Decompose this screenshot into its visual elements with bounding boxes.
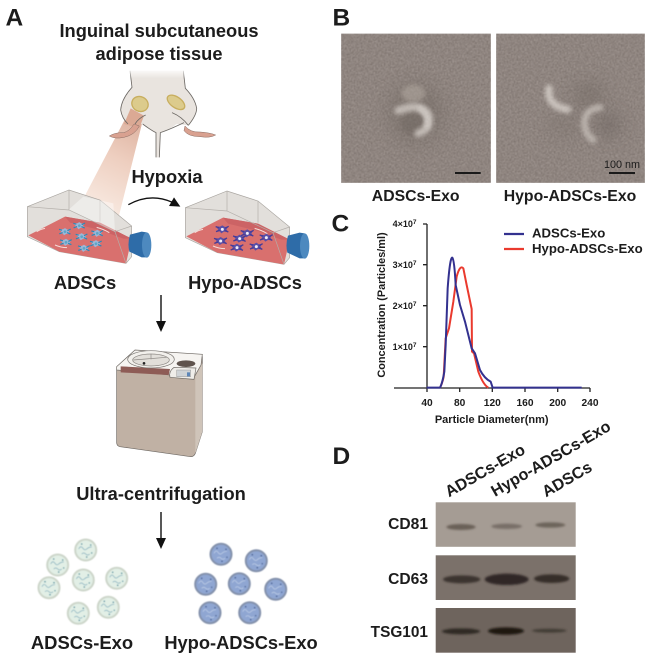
y-axis tick labels: 1×10 bbox=[393, 342, 413, 352]
blot: CD63 bbox=[436, 555, 576, 600]
icon: ultracentrifuge bbox=[117, 350, 202, 457]
icon: ADSCs exosome cluster bbox=[38, 540, 127, 624]
label: ADSCs: ADSCs bbox=[54, 272, 116, 293]
x-axis tick labels: 40 bbox=[421, 398, 433, 409]
panel C: particle size distribution bbox=[332, 210, 643, 426]
arrow: centrifuge to exosomes bbox=[156, 512, 166, 549]
panel letter D: D bbox=[332, 443, 350, 470]
micrograph: ADSCs-Exo bbox=[341, 34, 491, 183]
blot: TSG101 bbox=[436, 608, 576, 653]
illustration: mouse lower body bbox=[109, 68, 216, 157]
lane label: ADSCs: ADSCs bbox=[539, 458, 595, 501]
caption: Hypo-ADSCs-Exo: Hypo-ADSCs-Exo bbox=[504, 188, 637, 205]
y-axis title: Concentration (Particles/ml) bbox=[376, 232, 388, 378]
y-axis tick labels: 7 bbox=[413, 301, 417, 308]
icon: Hypo-ADSCs culture flask bbox=[185, 191, 309, 264]
x-axis tick labels: 160 bbox=[516, 398, 534, 409]
label: Hypo-ADSCs-Exo: Hypo-ADSCs-Exo bbox=[164, 632, 318, 653]
x-axis tick labels: 200 bbox=[549, 398, 567, 409]
line: ADSCs-Exo bbox=[427, 258, 582, 388]
lane label: ADSCs-Exo: ADSCs-Exo bbox=[442, 441, 529, 501]
panel letter B: B bbox=[332, 4, 350, 32]
heading: tissue source: Inguinal subcutaneous bbox=[59, 20, 259, 41]
y-axis tick labels: 4×10 bbox=[393, 219, 413, 229]
arrow: hypoxia treatment bbox=[128, 197, 180, 207]
y-axis tick labels: 2×10 bbox=[393, 301, 413, 311]
micrograph: Hypo-ADSCs-Exo bbox=[496, 34, 645, 183]
label: Hypo-ADSCs: Hypo-ADSCs bbox=[188, 272, 302, 293]
chart axes bbox=[394, 224, 590, 392]
panel B: electron micrographs bbox=[332, 4, 645, 205]
icon: Hypo-ADSCs exosome cluster bbox=[195, 544, 286, 623]
legend: ADSCs-Exo bbox=[532, 226, 605, 241]
y-axis tick labels bbox=[393, 219, 417, 352]
panel letter C: C bbox=[332, 210, 350, 238]
lane label: Hypo-ADSCs-Exo: Hypo-ADSCs-Exo bbox=[488, 417, 614, 500]
x-axis tick labels bbox=[421, 398, 599, 409]
scale bar: Hypo-ADSCs-Exo bbox=[609, 172, 635, 174]
x-axis tick labels: 120 bbox=[484, 398, 501, 409]
y-axis tick labels: 7 bbox=[413, 219, 417, 226]
scale bar: ADSCs-Exo bbox=[455, 172, 481, 174]
panel A: isolation workflow bbox=[6, 4, 318, 653]
line: Hypo-ADSCs-Exo bbox=[440, 267, 488, 388]
icon: ADSCs culture flask bbox=[27, 190, 151, 263]
label: ADSCs-Exo: ADSCs-Exo bbox=[31, 632, 133, 653]
legend: Hypo-ADSCs-Exo bbox=[532, 241, 643, 256]
callout: cone from tissue to flask bbox=[83, 108, 144, 232]
y-axis tick labels: 7 bbox=[413, 342, 417, 349]
protein label: CD81: CD81 bbox=[388, 516, 428, 533]
caption: ADSCs-Exo: ADSCs-Exo bbox=[372, 188, 460, 205]
label: Hypoxia: Hypoxia bbox=[131, 166, 203, 187]
y-axis tick labels: 3×10 bbox=[393, 260, 413, 270]
protein label: CD63: CD63 bbox=[388, 571, 428, 588]
arrow: flask to centrifuge bbox=[156, 295, 166, 332]
panel D: western blots bbox=[332, 417, 614, 653]
heading: tissue source line 2: adipose tissue bbox=[96, 43, 222, 64]
panel letter A: A bbox=[6, 4, 24, 32]
x-axis tick labels: 80 bbox=[454, 398, 466, 409]
x-axis title: Particle Diameter(nm) bbox=[435, 414, 549, 426]
protein label: TSG101: TSG101 bbox=[371, 624, 428, 641]
blot: CD81 bbox=[436, 502, 576, 547]
legend bbox=[504, 226, 643, 256]
y-axis tick labels: 7 bbox=[413, 260, 417, 267]
scale label: 100 nm bbox=[604, 159, 640, 171]
label: Ultra-centrifugation: Ultra-centrifugation bbox=[76, 483, 246, 504]
x-axis tick labels: 240 bbox=[582, 398, 599, 409]
